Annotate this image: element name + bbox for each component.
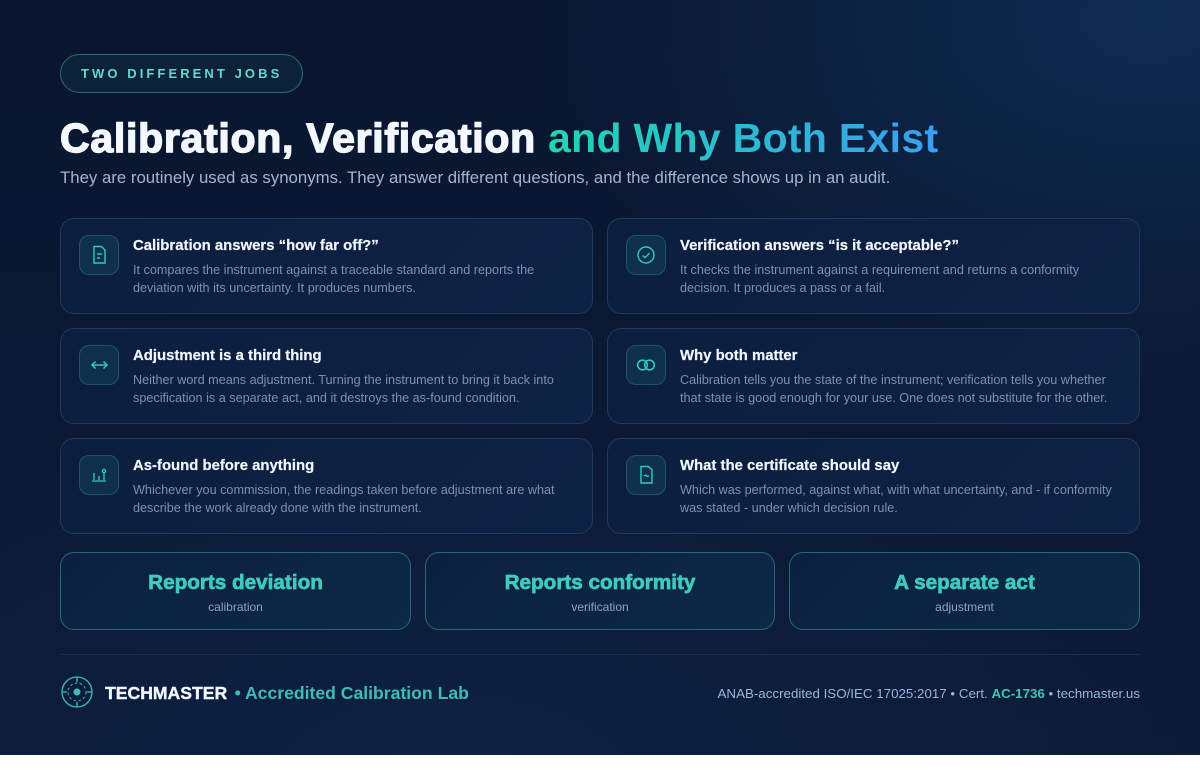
stat: reports conformity: Reports conformity — [505, 571, 695, 594]
eyebrow pill — [60, 54, 303, 93]
icon: certificate page — [626, 455, 666, 495]
card text: Which was performed, against what, with what uncertainty, and - if conformity — [680, 483, 1112, 497]
panel: as-found: describe the work already done with the instrument. — [133, 501, 422, 515]
card text: Neither word means adjustment. Turning the instrument to bring it back into — [133, 373, 554, 387]
stat: a separate act: A separate act — [894, 571, 1035, 594]
title: Calibration, Verification and Why Both Exist — [60, 115, 938, 161]
card heading: Verification answers “is it acceptable?” — [680, 238, 959, 254]
panel: adjustment: specification is a separate act, and it destroys the as-found condition. — [133, 391, 519, 405]
stat: reports conformity — [425, 552, 775, 630]
card heading: Adjustment is a third thing — [133, 348, 322, 364]
panel: calibration: deviation with its uncertainty. It produces numbers. — [133, 281, 416, 295]
card text: Calibration tells you the state of the instrument; verification tells you whether — [680, 373, 1106, 387]
panel: as-found — [60, 438, 593, 534]
footer brand: TECHMASTER • Accredited Calibration Lab — [105, 683, 469, 703]
panel: why both matter: that state is good enough for your use. One does not substitute for the other. — [680, 391, 1107, 405]
logo — [61, 676, 93, 708]
icon: check circle — [626, 235, 666, 275]
stat: a separate act: adjustment — [935, 600, 994, 614]
card text: Whichever you commission, the readings taken before adjustment are what — [133, 483, 555, 497]
stat: reports deviation: calibration — [208, 600, 263, 614]
eyebrow pill: TWO DIFFERENT JOBS — [81, 66, 282, 81]
card text: It checks the instrument against a requirement and returns a conformity — [680, 263, 1079, 277]
icon: overlapping circles — [626, 345, 666, 385]
footer credentials: ANAB-accredited ISO/IEC 17025:2017 • Cert. AC-1736 • techmaster.us — [718, 686, 1140, 701]
icon: double arrow — [79, 345, 119, 385]
panel: adjustment — [60, 328, 593, 424]
icon: document — [79, 235, 119, 275]
icon: bar chart — [79, 455, 119, 495]
card heading: Why both matter — [680, 348, 797, 364]
card heading: What the certificate should say — [680, 458, 899, 474]
card text: It compares the instrument against a traceable standard and reports the — [133, 263, 534, 277]
stat: reports deviation: Reports deviation — [148, 571, 323, 594]
card heading: Calibration answers “how far off?” — [133, 238, 379, 254]
stat: a separate act — [789, 552, 1140, 630]
panel: why both matter — [607, 328, 1140, 424]
card heading: As-found before anything — [133, 458, 314, 474]
stat: reports deviation — [60, 552, 411, 630]
panel: calibration — [60, 218, 593, 314]
subtitle: They are routinely used as synonyms. They answer different questions, and the difference shows up in an audit. — [60, 168, 890, 187]
panel: verification — [607, 218, 1140, 314]
stat: reports conformity: verification — [571, 600, 629, 614]
panel: verification: decision. It produces a pass or a fail. — [680, 281, 885, 295]
panel: certificate: was stated - under which decision rule. — [680, 501, 898, 515]
panel: certificate — [607, 438, 1140, 534]
